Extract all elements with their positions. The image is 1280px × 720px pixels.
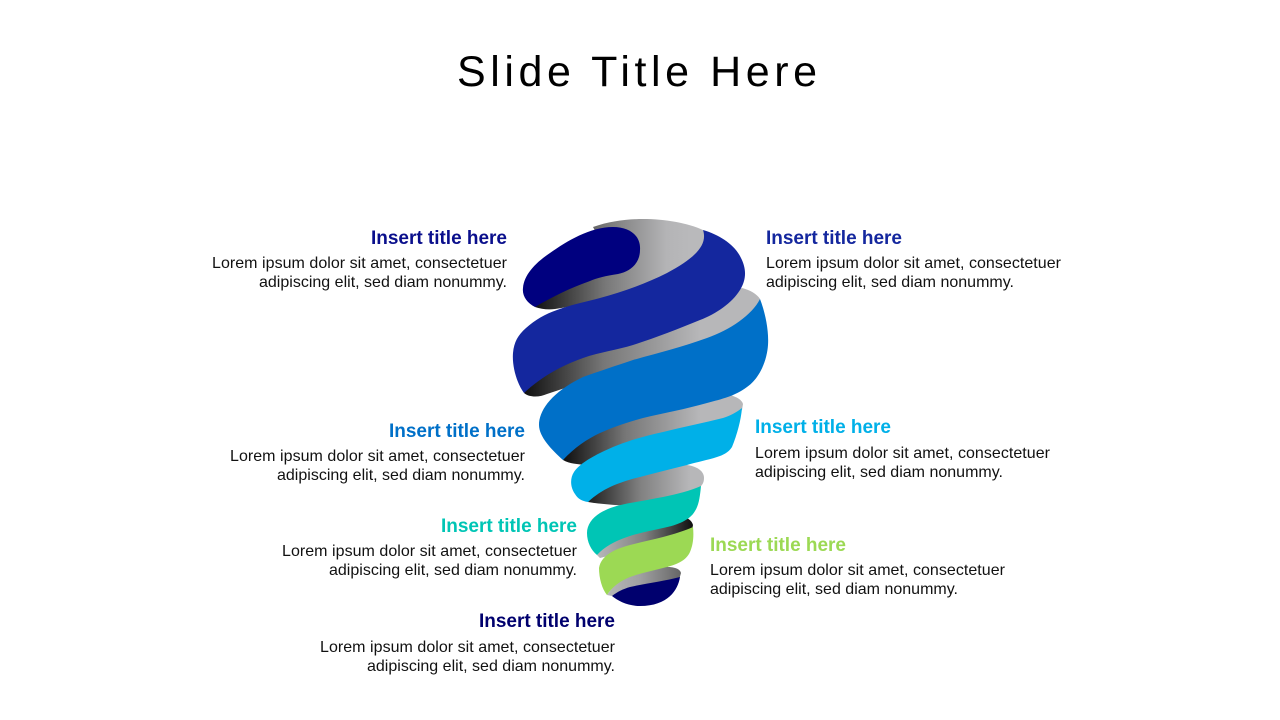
text block: lower right: Insert title here: [710, 535, 846, 556]
text block: middle right: Insert title here: [755, 417, 891, 438]
text block: top right: [766, 228, 1062, 291]
title: Slide Title Here: [457, 48, 817, 96]
band: top navy: [523, 227, 640, 307]
text block: lower left: Lorem ipsum dolor sit amet, consectetuer: [282, 543, 578, 560]
text block: middle right: adipiscing elit, sed diam nonummy.: [755, 464, 1003, 481]
text block: lower left: Insert title here: [441, 516, 577, 537]
text block: lower right: Lorem ipsum dolor sit amet, consectetuer: [710, 562, 1006, 579]
band: fourth grey shading: [588, 462, 704, 506]
text block: bottom: Insert title here: [479, 611, 615, 632]
text block: top left: adipiscing elit, sed diam nonummy.: [259, 274, 507, 291]
band: top grey shading: [535, 219, 710, 309]
text block: lower left: [282, 516, 578, 579]
band: second grey shading: [524, 288, 760, 396]
band: light blue: [571, 408, 742, 502]
band: teal: [587, 486, 701, 555]
band: third grey shading: [563, 395, 743, 465]
text block: middle right: Lorem ipsum dolor sit amet, consectetuer: [755, 445, 1051, 462]
band: fifth grey shading: [597, 517, 693, 558]
text block: lower right: [710, 535, 1006, 598]
text block: top right: adipiscing elit, sed diam nonummy.: [766, 274, 1014, 291]
band: green: [599, 527, 693, 595]
band: bottom navy: [612, 577, 680, 606]
band: sixth grey shading: [607, 560, 681, 596]
text block: top right: Lorem ipsum dolor sit amet, consectetuer: [766, 255, 1062, 272]
text block: bottom: [320, 611, 616, 675]
text block: bottom: adipiscing elit, sed diam nonummy.: [367, 658, 615, 675]
band: second blue: [513, 230, 745, 393]
text block: middle left: [230, 421, 526, 484]
text block: top left: [212, 228, 508, 291]
spiral light bulb graphic: [513, 219, 768, 606]
text block: middle left: Insert title here: [389, 421, 525, 442]
text block: lower right: adipiscing elit, sed diam nonummy.: [710, 581, 958, 598]
band: third blue: [539, 299, 768, 460]
text block: middle left: Lorem ipsum dolor sit amet, consectetuer: [230, 448, 526, 465]
text block: bottom: Lorem ipsum dolor sit amet, consectetuer: [320, 639, 616, 656]
text block: middle left: adipiscing elit, sed diam nonummy.: [277, 467, 525, 484]
text block: lower left: adipiscing elit, sed diam nonummy.: [329, 562, 577, 579]
text block: top left: Insert title here: [371, 228, 507, 249]
text block: top right: Insert title here: [766, 228, 902, 249]
text block: top left: Lorem ipsum dolor sit amet, consectetuer: [212, 255, 508, 272]
text block: middle right: [755, 417, 1051, 481]
